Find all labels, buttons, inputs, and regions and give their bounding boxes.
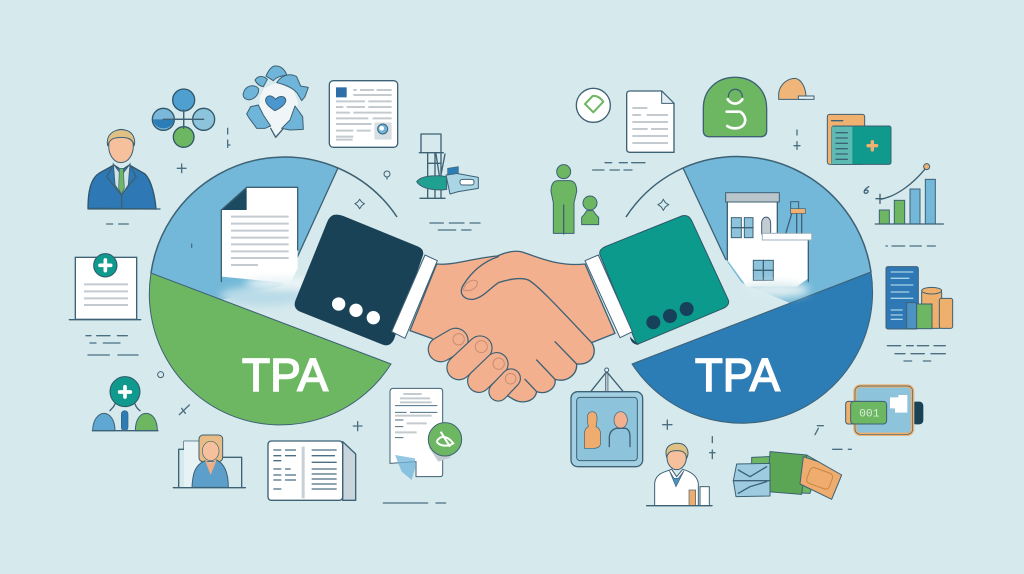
icon: molecule network: [152, 89, 215, 147]
icon: medical clipboard: [69, 254, 141, 355]
right dark blue segment: [632, 272, 873, 423]
left green segment: [149, 273, 391, 425]
icon: signed certificate: [390, 388, 462, 480]
icon: businessman: [88, 129, 160, 209]
icon: payment card wallet: 001: [859, 409, 880, 421]
handshake: [295, 215, 729, 402]
left fade glow: [245, 277, 325, 289]
decorations lower left: [158, 372, 446, 503]
icon: medical team badge: [92, 377, 158, 431]
icon: open book: [268, 441, 356, 500]
left fade glow under document: [220, 286, 304, 306]
hand clasp: [410, 251, 615, 402]
left circle outline arc: [151, 157, 397, 273]
icon: envelopes and cards: [733, 452, 842, 499]
icon: machine with teal capsule: [417, 134, 478, 198]
icon: medical folder: [827, 114, 891, 164]
icon: payment card wallet: [846, 386, 923, 434]
decorations upper left: [107, 128, 480, 247]
decorations lower right: [663, 346, 945, 459]
icon: hanging portrait frame: [571, 368, 643, 467]
icon: documents and supply jars: [886, 267, 953, 329]
icon: diamond badge: [576, 88, 610, 122]
icons: lower left: [69, 254, 462, 503]
document in left circle: [221, 187, 298, 283]
right wedge edge: [683, 168, 726, 260]
label: TPA right: TPA: [695, 349, 780, 401]
icons: upper right: [551, 77, 943, 246]
right circle outline arc: [626, 157, 871, 272]
right shirt cuff: [585, 255, 632, 338]
left shirt cuff: [392, 255, 437, 338]
icon: two green figures: [551, 165, 599, 234]
icon: doctor: [647, 443, 712, 506]
icon: care recycling ring with heart: [243, 66, 308, 137]
icons: upper left: [88, 66, 480, 247]
fingers: [441, 334, 516, 392]
icon: orange cap: [779, 78, 814, 99]
left sleeve: [295, 215, 423, 345]
left wedge edge: [296, 168, 338, 260]
icon: report card: [329, 81, 398, 147]
right fade glow: [741, 282, 809, 298]
panel: right TPA circle: [626, 157, 873, 423]
icon: growth bar chart: [864, 164, 943, 224]
label: TPA left: TPA: [242, 349, 328, 401]
panel: left TPA circle: [149, 157, 397, 425]
icons: lower right: [571, 267, 953, 506]
thumb: [461, 257, 592, 343]
decorations upper right: [593, 130, 935, 246]
building in right circle: [726, 193, 812, 287]
right sleeve: [600, 216, 729, 345]
icon: green person badge: [703, 77, 767, 137]
left circle light blue wedge: [151, 157, 338, 300]
icon: text document: [627, 91, 674, 152]
icon: woman at desk: [173, 435, 245, 488]
right circle light blue wedge: [683, 157, 871, 303]
